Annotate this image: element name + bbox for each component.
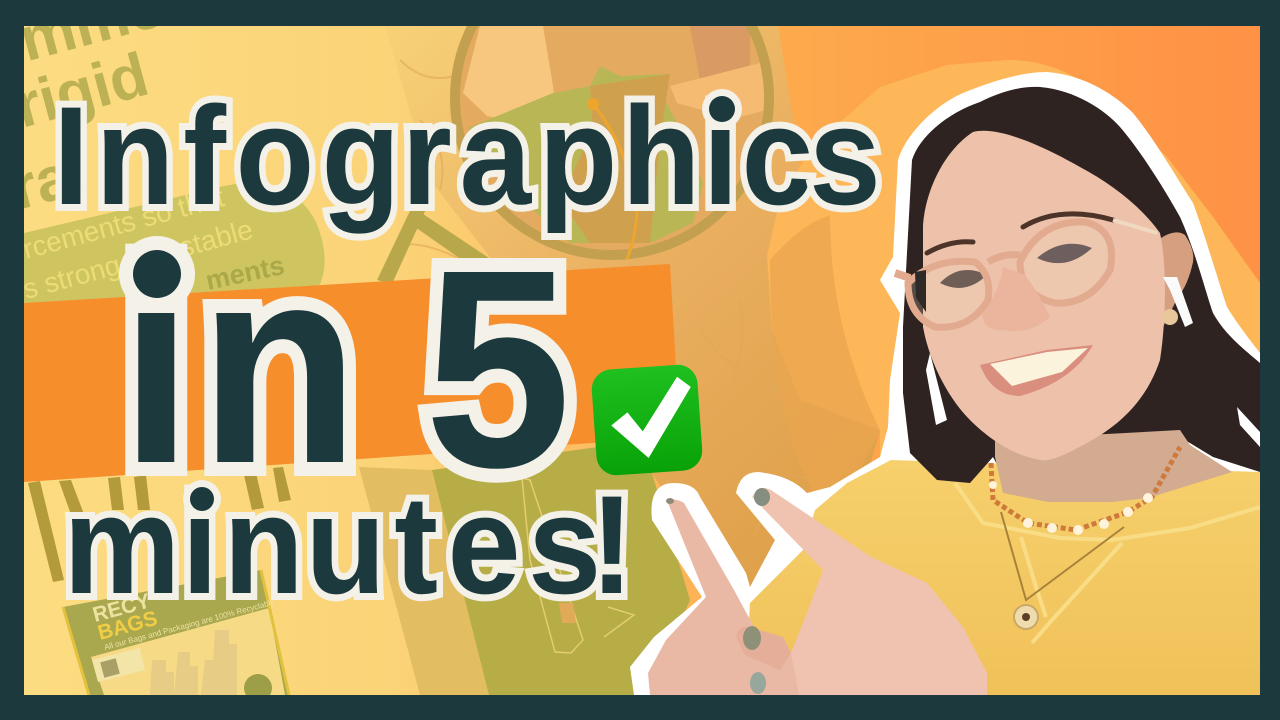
icon: green check mark <box>590 363 704 477</box>
faded blob with caption: s strong and stable <box>20 214 256 305</box>
faded heading text <box>24 26 156 208</box>
airpod <box>1163 277 1193 327</box>
headline <box>53 77 881 623</box>
sweater collar and seams <box>955 483 1260 643</box>
faded green bag <box>359 467 489 695</box>
eyes <box>940 270 987 288</box>
faded bag line art <box>522 478 634 653</box>
faded tree area <box>385 26 880 610</box>
faded stripes <box>28 467 291 582</box>
neck <box>995 430 1232 502</box>
faded poster: All our Bags and Packaging are 100% Recyclable <box>103 598 276 652</box>
lips <box>980 345 1093 396</box>
faded poster <box>63 570 289 702</box>
faded poster: RECY <box>90 590 153 627</box>
faded magnifier circle <box>455 0 770 259</box>
pendant necklace <box>1001 512 1124 629</box>
faded tree branches <box>400 60 459 258</box>
glasses <box>895 220 1157 327</box>
orange band <box>24 264 680 482</box>
white cut-out outline <box>630 72 1260 695</box>
faded straps <box>377 211 489 282</box>
ear <box>1158 232 1193 327</box>
faded heading text: rai <box>4 137 95 224</box>
teeth <box>990 348 1088 386</box>
hair <box>903 87 1260 483</box>
faded blob with caption: ments <box>203 250 287 296</box>
dark lens reflection <box>915 270 926 312</box>
faded blob with caption <box>24 184 325 303</box>
headline line: minutes!: minutes! <box>63 466 634 623</box>
beaded necklace <box>989 447 1180 535</box>
headline line: in 5: 5 <box>424 211 571 526</box>
nose <box>982 267 1050 331</box>
faded blob with caption: rcements so that <box>20 181 228 265</box>
headline line: in 5 <box>119 236 577 483</box>
eyebrows <box>927 214 1113 253</box>
pointing hands <box>648 488 987 695</box>
hair gaps <box>926 353 1260 447</box>
person <box>630 72 1260 695</box>
faded poster: BAGS <box>95 607 160 645</box>
headline line: Infographics: Infographics <box>53 77 881 234</box>
faded poster collage <box>0 0 880 702</box>
peach circle behind person <box>767 60 1260 456</box>
headline line: in 5: in <box>120 206 359 522</box>
faded heading text: rigid <box>8 40 155 142</box>
face <box>923 131 1165 460</box>
earring <box>1162 309 1178 325</box>
sweater <box>745 460 1260 695</box>
